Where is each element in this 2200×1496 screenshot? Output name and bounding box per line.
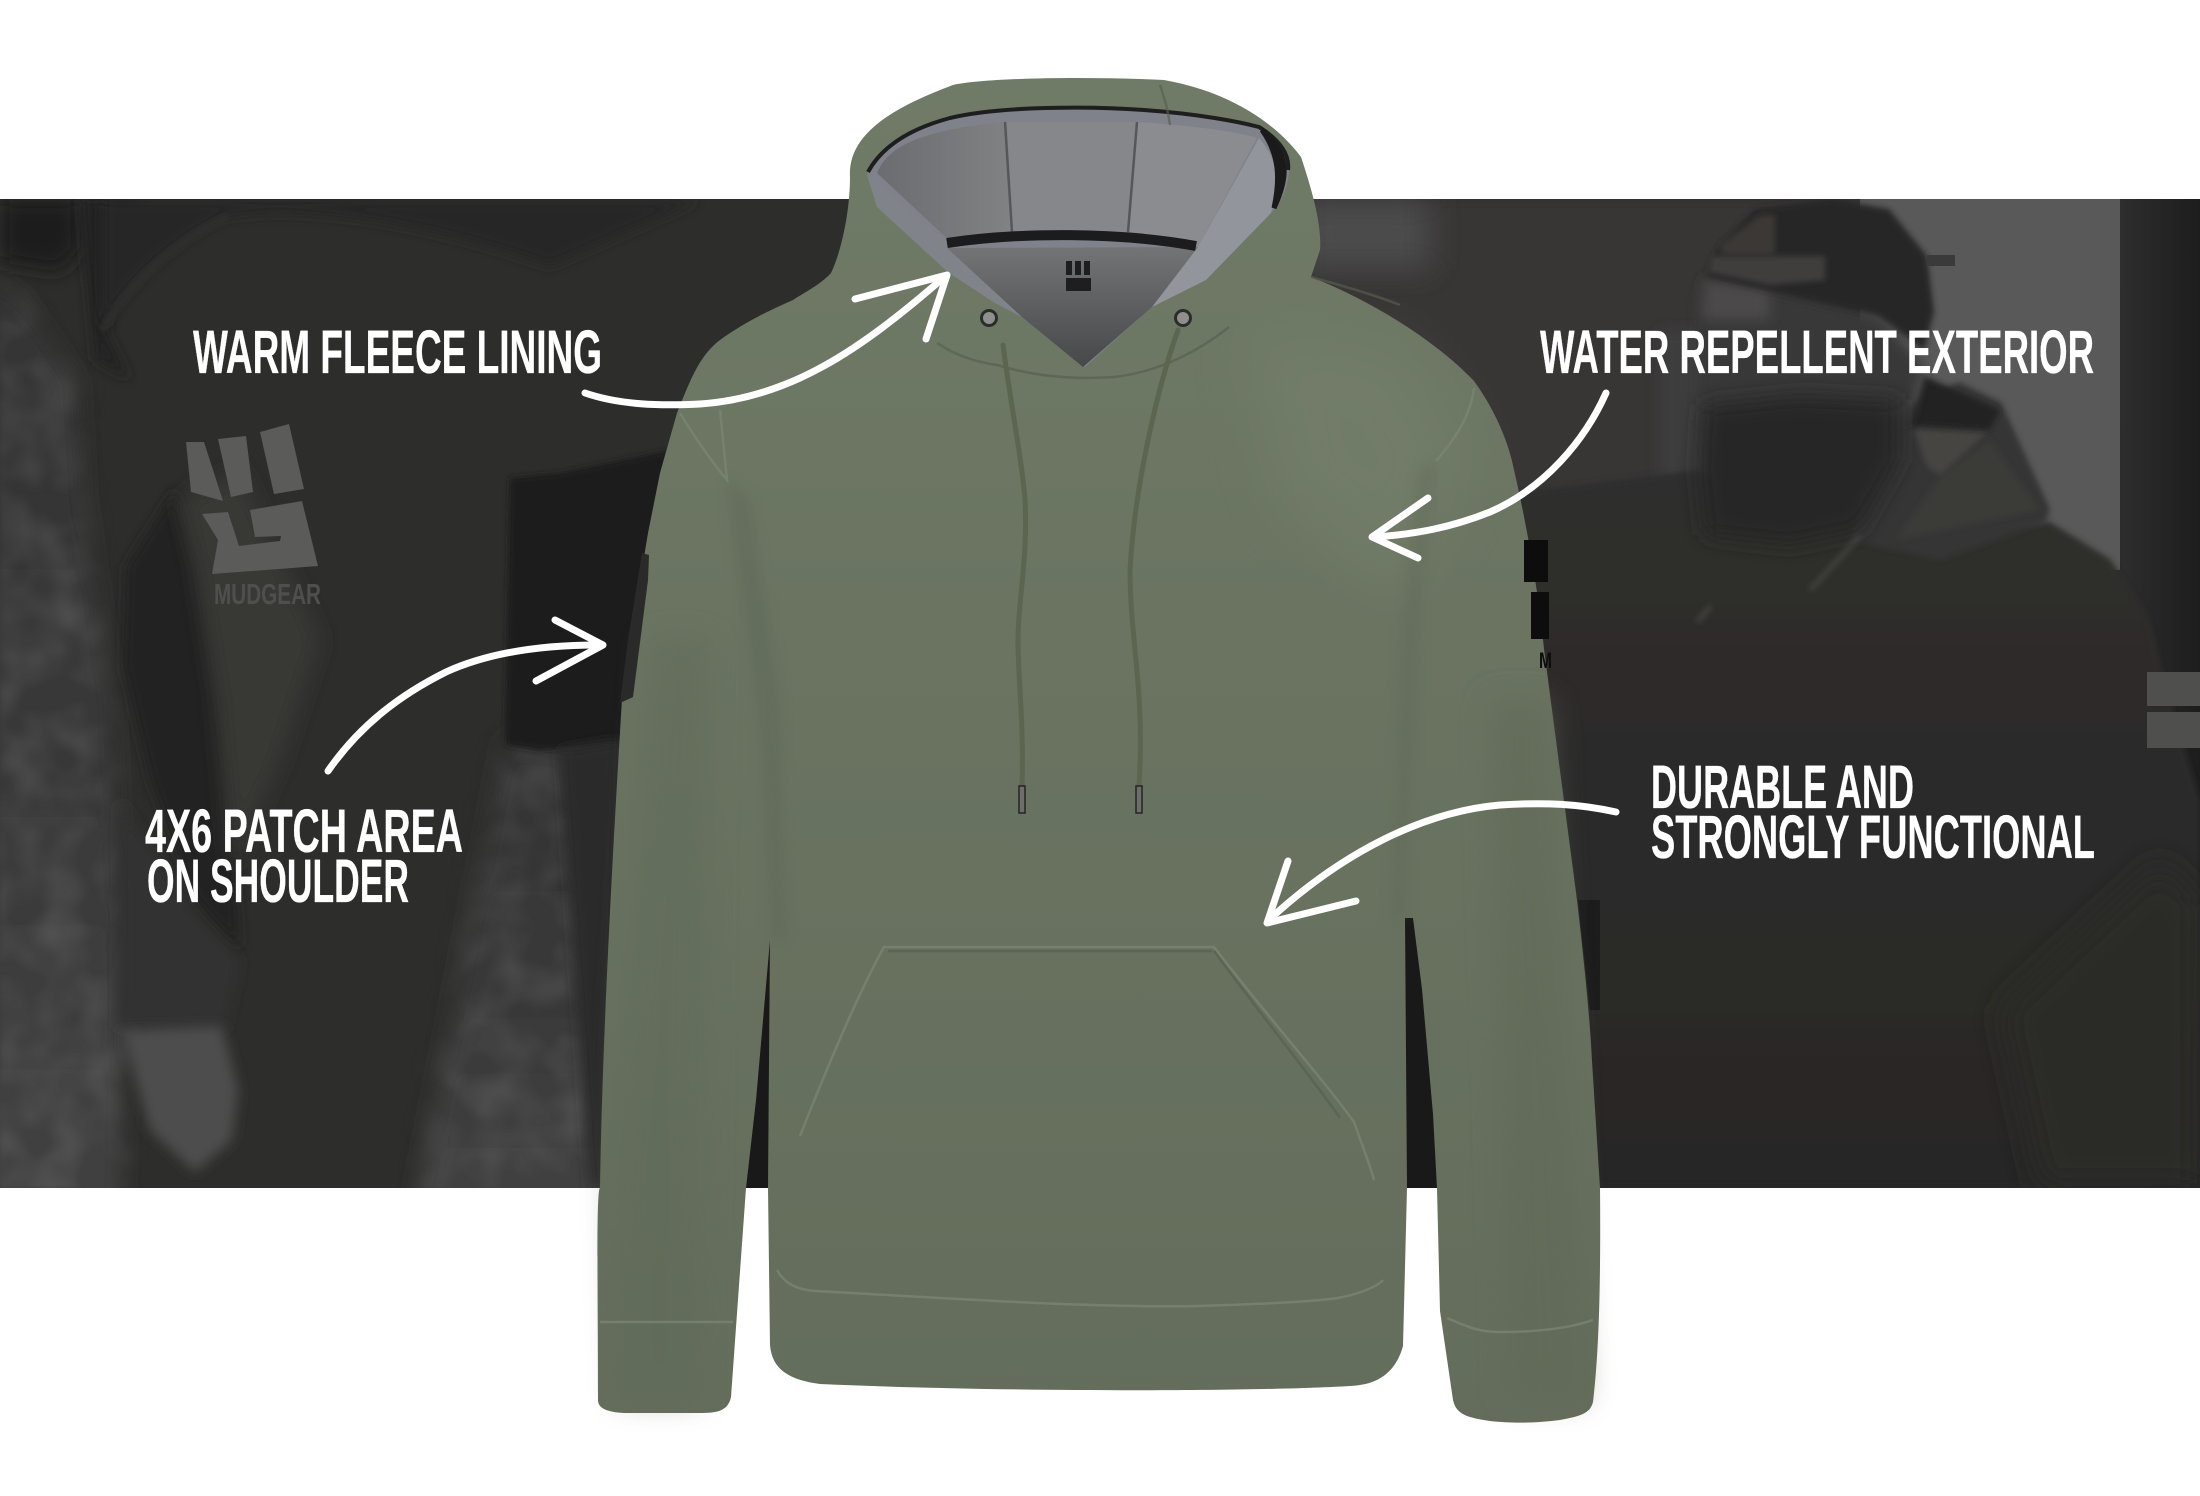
- hair at nape: [1910, 376, 2000, 430]
- aglets: [1019, 786, 1142, 813]
- neck tape: [947, 235, 1196, 246]
- sleeve logo on man: [2147, 672, 2200, 748]
- grommets: [982, 310, 1190, 326]
- drawstring on man: [1697, 536, 1860, 622]
- sleeve logo: [1524, 540, 1552, 673]
- sleeve logo: M: [1539, 648, 1552, 673]
- face: [1860, 312, 1926, 412]
- side seam shading: [727, 480, 786, 940]
- hood rim shadow: [868, 108, 1288, 172]
- arrow: to shoulder patch: [328, 620, 603, 771]
- kangaroo pocket: [800, 947, 1374, 1180]
- label: 4x6 patch area on shoulder: [145, 797, 463, 915]
- black zone under runner's arm: [505, 450, 670, 750]
- neck logo: [1066, 261, 1091, 291]
- label: 4x6 patch area on shoulder: 4X6 PATCH AREA: [145, 797, 463, 865]
- label: 4x6 patch area on shoulder: ON SHOULDER: [147, 847, 409, 915]
- photo: runner from behind: [0, 199, 666, 1188]
- label: durable and strongly functional: DURABLE AND: [1651, 753, 1914, 821]
- hem rib seam: [777, 1270, 1383, 1306]
- patch logo on runner's arm: [186, 424, 321, 611]
- hoodie body: [598, 78, 1600, 1423]
- cap: [1706, 199, 1934, 350]
- hoodie product: [598, 78, 1600, 1423]
- label: durable and strongly functional: [1651, 753, 2095, 871]
- dark underarm gaps: [746, 940, 770, 1188]
- soft shading: [612, 640, 710, 1400]
- label: warm fleece lining: WARM FLEECE LINING: [193, 318, 602, 386]
- cuff seams: [600, 1321, 733, 1323]
- arrow: to exterior fabric: [1372, 393, 1606, 558]
- patch logo on runner's arm: MUDGEAR: [214, 579, 321, 611]
- arrow: to hood lining: [585, 275, 947, 405]
- man's hoodie: [1530, 472, 2200, 890]
- photo: bearded man in hoodie: [1250, 199, 2200, 1188]
- background photo band: [0, 199, 2200, 1230]
- velcro patch on left shoulder: [620, 553, 649, 703]
- arrow: to body of hoodie: [1267, 804, 1616, 923]
- collar and shoulder seams: [937, 327, 1229, 378]
- hood interior: [867, 108, 1290, 367]
- drawstrings: [1003, 330, 1178, 787]
- beard: [1698, 395, 1900, 545]
